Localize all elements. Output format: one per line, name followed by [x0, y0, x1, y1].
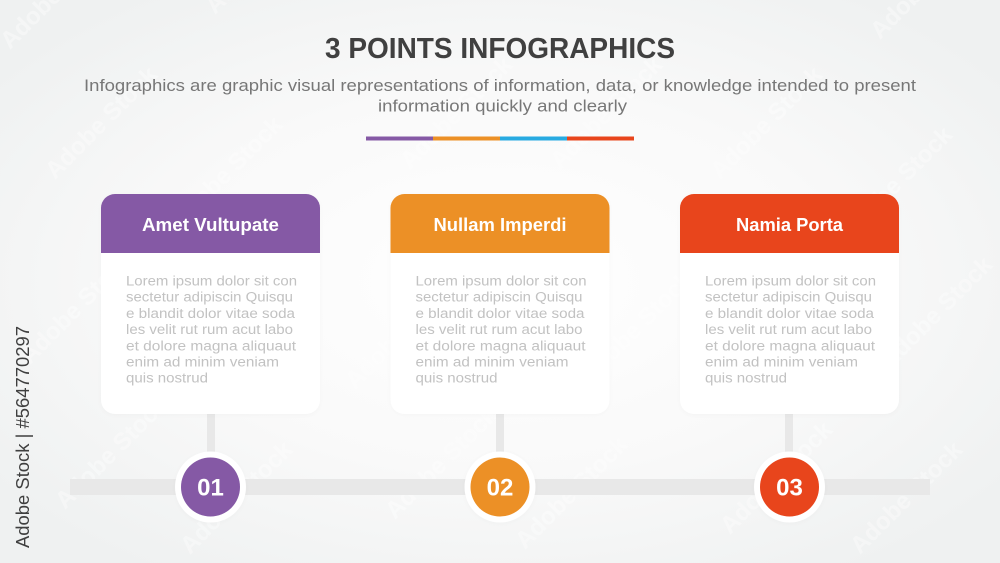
- panel: Nullam Imperdi: [390, 194, 610, 414]
- body text 1: quis nostrud: [126, 371, 208, 386]
- body text 3: Lorem ipsum dolor sit con: [705, 274, 876, 288]
- card body 1: [101, 194, 320, 414]
- watermark pattern: Adobe Stock: [510, 431, 633, 554]
- body text 1: [126, 274, 297, 386]
- body text 2: quis nostrud: [416, 371, 498, 386]
- watermark pattern: Adobe Stock: [715, 416, 838, 539]
- body text 1: les velit rut rum acut labo: [126, 322, 293, 337]
- body text 2: sectetur adipiscin Quisqu: [416, 290, 582, 305]
- card body 2: [390, 194, 610, 414]
- watermark pattern: Adobe Stock: [50, 391, 173, 514]
- watermark pattern: Adobe Stock: [165, 111, 288, 234]
- timeline step 2: [464, 412, 536, 522]
- timeline step 3: [754, 412, 825, 522]
- body text 3: enim ad minim veniam: [705, 354, 858, 370]
- title: 3 POINTS INFOGRAPHICS: [325, 33, 675, 65]
- body text 2: et dolore magna aliquaut: [416, 338, 586, 353]
- number badge 2: 02: [487, 474, 513, 502]
- card header 2: [390, 194, 610, 253]
- body text 3: quis nostrud: [705, 371, 787, 386]
- heading 2: Nullam Imperdi: [434, 215, 566, 235]
- body text 3: [705, 274, 876, 386]
- body text 2: e blandit dolor vitae soda: [416, 306, 585, 321]
- watermark pattern: Adobe Stock: [380, 401, 503, 524]
- timeline step 1: [175, 412, 246, 522]
- card header 3: [680, 194, 899, 253]
- heading 3: Namia Porta: [736, 215, 844, 235]
- subtitle: [84, 76, 916, 116]
- body text 1: e blandit dolor vitae soda: [126, 306, 296, 321]
- connector 2: [496, 412, 504, 454]
- watermark pattern: Adobe Stock: [340, 271, 463, 394]
- multicolor divider: [366, 136, 634, 140]
- body text 3: et dolore magna aliquaut: [705, 338, 875, 353]
- panel: Namia Porta: [680, 194, 899, 414]
- connector 3: [785, 412, 793, 454]
- subtitle: Infographics are graphic visual representations of information, data, or knowledge intended to present: [84, 76, 916, 95]
- body text 1: enim ad minim veniam: [126, 354, 279, 370]
- body text 1: Lorem ipsum dolor sit con: [126, 274, 297, 288]
- body text 2: Lorem ipsum dolor sit con: [416, 274, 586, 288]
- body text 3: les velit rut rum acut labo: [705, 322, 872, 337]
- body text 3: sectetur adipiscin Quisqu: [705, 290, 872, 305]
- subtitle: information quickly and clearly: [378, 96, 628, 116]
- body text 2: les velit rut rum acut labo: [416, 322, 582, 337]
- watermark pattern: Adobe Stock: [875, 251, 998, 374]
- panel: Amet Vultupate: [101, 194, 320, 414]
- stock credit: Adobe Stock | #564770297: [13, 326, 33, 548]
- watermark pattern: Adobe Stock: [575, 266, 698, 389]
- watermark pattern: Adobe Stock: [15, 246, 138, 369]
- watermark pattern: Adobe Stock: [845, 436, 968, 559]
- body text 3: e blandit dolor vitae soda: [705, 306, 875, 321]
- watermark pattern: Adobe Stock: [545, 51, 668, 174]
- watermark pattern: Adobe Stock: [175, 436, 298, 559]
- card header 1: [101, 194, 320, 253]
- connector 1: [207, 412, 215, 454]
- number badge 1: 01: [197, 474, 224, 502]
- timeline bar: [70, 479, 930, 495]
- number badge 3: 03: [776, 474, 803, 502]
- watermark pattern: Adobe Stock: [835, 121, 958, 244]
- heading 1: Amet Vultupate: [142, 215, 279, 235]
- body text 2: enim ad minim veniam: [416, 354, 568, 370]
- watermark pattern: Adobe Stock: [40, 61, 163, 184]
- watermark pattern: Adobe Stock: [705, 61, 828, 184]
- watermark pattern: Adobe Stock: [395, 51, 518, 174]
- body text 2: [416, 274, 586, 386]
- body text 1: sectetur adipiscin Quisqu: [126, 290, 293, 305]
- body text 1: et dolore magna aliquaut: [126, 338, 296, 353]
- card body 3: [680, 194, 899, 414]
